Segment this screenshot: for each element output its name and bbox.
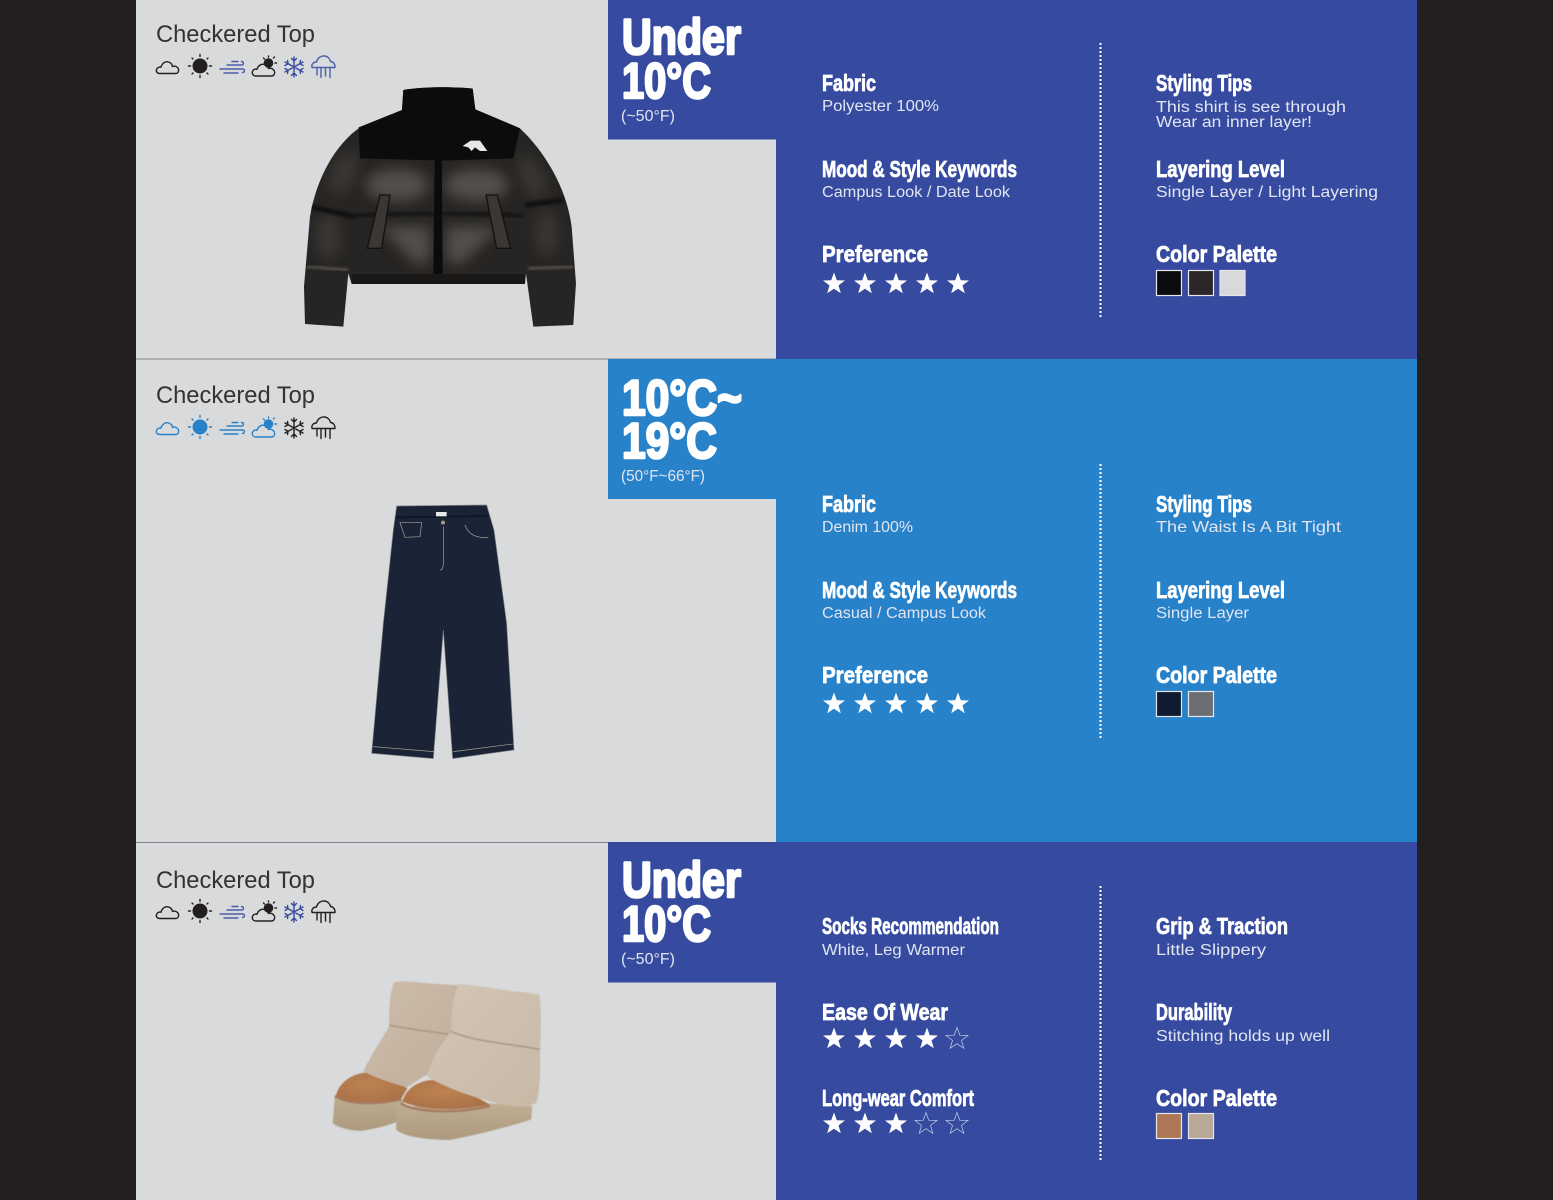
details right column: Grip & Traction bbox=[1156, 913, 1288, 939]
temperature tab: 19°C bbox=[622, 413, 717, 469]
color swatches bbox=[1156, 1114, 1214, 1138]
details left column: Preference bbox=[822, 662, 928, 688]
jacket illustration bbox=[304, 87, 576, 327]
preference stars bbox=[823, 272, 969, 293]
details right column: Color Palette bbox=[1156, 1085, 1277, 1111]
details right column: Color Palette bbox=[1156, 241, 1277, 267]
temperature tab: 10°C bbox=[622, 53, 711, 109]
details left column: Polyester 100% bbox=[822, 98, 939, 115]
item name: Checkered Top bbox=[156, 382, 315, 409]
panel: 10C to 19C jeans bbox=[136, 359, 1417, 842]
details right column: Styling Tips bbox=[1156, 491, 1252, 517]
details right column: The Waist Is A Bit Tight bbox=[1156, 519, 1342, 536]
details left column: Casual / Campus Look bbox=[822, 605, 986, 622]
details right column: Single Layer bbox=[1156, 605, 1249, 622]
panel: under 10C boots bbox=[136, 842, 1417, 1200]
temperature tab: 10°C bbox=[622, 896, 711, 952]
details left column: Fabric bbox=[822, 70, 876, 96]
temperature tab: 10°C~ bbox=[622, 370, 742, 426]
long-wear comfort stars bbox=[823, 1112, 968, 1133]
item name: Checkered Top bbox=[156, 867, 315, 894]
ease of wear stars bbox=[823, 1028, 968, 1048]
weather icons bbox=[156, 54, 335, 78]
details right column: Stitching holds up well bbox=[1156, 1028, 1330, 1045]
details left column: White, Leg Warmer bbox=[822, 942, 965, 959]
details right column: Wear an inner layer! bbox=[1156, 114, 1312, 131]
temperature tab: Under bbox=[622, 852, 741, 908]
weather icons bbox=[156, 416, 335, 438]
details left column: Ease Of Wear bbox=[822, 999, 948, 1025]
details left column: Socks Recommendation bbox=[822, 913, 999, 939]
temperature tab bbox=[608, 0, 777, 140]
item name: Checkered Top bbox=[156, 21, 315, 48]
details right column: Styling Tips bbox=[1156, 70, 1252, 96]
details right column: Single Layer / Light Layering bbox=[1156, 184, 1378, 201]
color swatches bbox=[1156, 270, 1245, 296]
details right column bbox=[1156, 913, 1330, 1138]
details right column: Durability bbox=[1156, 999, 1232, 1025]
temperature tab bbox=[608, 842, 777, 982]
details left column: Denim 100% bbox=[822, 519, 913, 536]
details right column: Little Slippery bbox=[1156, 942, 1266, 959]
temperature tab: (~50°F) bbox=[621, 108, 675, 125]
temperature tab: Under bbox=[622, 9, 741, 65]
details right column: Layering Level bbox=[1156, 577, 1285, 603]
details left column bbox=[822, 491, 1017, 713]
jeans illustration bbox=[372, 505, 514, 759]
details left column: Preference bbox=[822, 241, 928, 267]
details right column: Color Palette bbox=[1156, 662, 1277, 688]
details left column bbox=[822, 913, 999, 1133]
preference stars bbox=[823, 692, 969, 713]
weather icons bbox=[156, 900, 335, 922]
details left column: Mood & Style Keywords bbox=[822, 577, 1017, 603]
details left column: Fabric bbox=[822, 491, 876, 517]
boots illustration bbox=[333, 981, 541, 1140]
temperature tab bbox=[608, 359, 777, 499]
temperature tab: (~50°F) bbox=[621, 951, 675, 968]
temperature tab: (50°F~66°F) bbox=[621, 468, 705, 485]
details left column: Long-wear Comfort bbox=[822, 1085, 974, 1111]
details left column bbox=[822, 70, 1017, 293]
details left column: Mood & Style Keywords bbox=[822, 156, 1017, 182]
details right column bbox=[1156, 70, 1378, 296]
details right column: Layering Level bbox=[1156, 156, 1285, 182]
color swatches bbox=[1156, 692, 1214, 716]
details right column bbox=[1156, 491, 1342, 716]
details left column: Campus Look / Date Look bbox=[822, 184, 1010, 201]
panel: under 10C jacket bbox=[136, 0, 1417, 359]
details right column: This shirt is see through bbox=[1156, 99, 1346, 116]
